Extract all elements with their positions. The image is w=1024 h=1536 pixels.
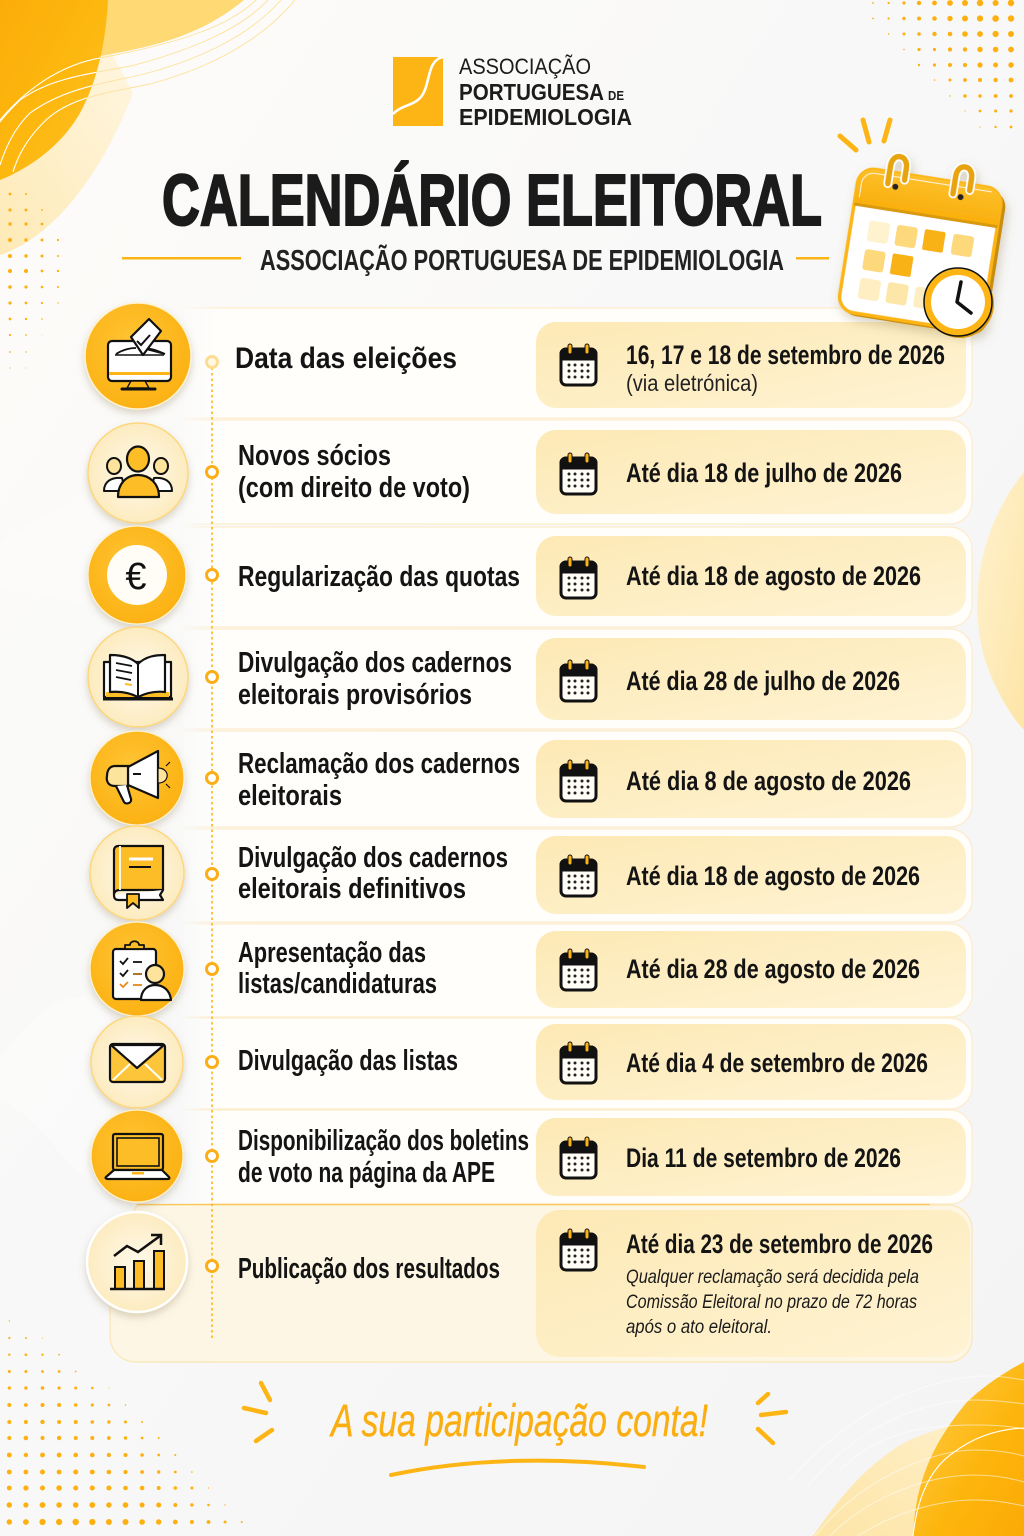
calendar illustration with clock bbox=[837, 120, 1011, 338]
connector dot bbox=[206, 356, 218, 368]
row 2: novos sócios bbox=[88, 423, 966, 523]
clock bbox=[924, 268, 994, 338]
rays bbox=[840, 120, 890, 150]
date box: Até dia 18 de agosto de 2026 bbox=[626, 861, 920, 891]
connector dot bbox=[206, 672, 218, 682]
connector dot bbox=[206, 1056, 218, 1068]
date box: Até dia 28 de julho de 2026 bbox=[626, 666, 900, 696]
background decoration: bottom right orange bbox=[790, 1362, 1024, 1536]
row 3: regularização das quotas bbox=[88, 526, 966, 624]
date box bbox=[536, 740, 966, 818]
subtitle: ASSOCIAÇÃO PORTUGUESA DE EPIDEMIOLOGIA bbox=[260, 243, 784, 277]
label: Divulgação das listas bbox=[238, 1045, 458, 1077]
label: listas/candidaturas bbox=[238, 968, 437, 1000]
label: Reclamação dos cadernos bbox=[238, 748, 520, 780]
date box: Até dia 8 de agosto de 2026 bbox=[626, 766, 911, 796]
dot pattern: top right bbox=[872, 0, 1014, 128]
date box bbox=[536, 1118, 966, 1196]
row 7: apresentação bbox=[90, 922, 966, 1016]
label: eleitorais bbox=[238, 780, 342, 812]
row 4: cadernos provisórios bbox=[88, 627, 966, 727]
icon: growth chart bbox=[87, 1212, 187, 1312]
note: após o ato eleitoral. bbox=[626, 1317, 772, 1338]
icon: open book bbox=[88, 627, 188, 727]
background decoration: soft white shapes bbox=[0, 470, 180, 1200]
row 6: cadernos definitivos bbox=[90, 826, 966, 920]
label: eleitorais provisórios bbox=[238, 679, 472, 711]
connector dot bbox=[206, 868, 218, 880]
burst right bbox=[758, 1394, 786, 1443]
date box: Até dia 18 de julho de 2026 bbox=[626, 458, 902, 488]
icon: euro bbox=[88, 526, 186, 624]
dot pattern: bottom left bbox=[7, 1320, 243, 1525]
slogan text: A sua participação conta! bbox=[329, 1395, 708, 1446]
icon: euro: € bbox=[125, 556, 147, 598]
logo text: ASSOCIAÇÃO bbox=[459, 54, 591, 79]
icon: laptop bbox=[91, 1110, 183, 1202]
row 8: divulgação das listas bbox=[91, 1016, 966, 1108]
icon: closed book bbox=[90, 826, 184, 920]
label bbox=[238, 440, 470, 504]
date box: Até dia 28 de agosto de 2026 bbox=[626, 954, 920, 984]
date box: Até dia 23 de setembro de 2026 bbox=[626, 1229, 933, 1259]
date box bbox=[536, 322, 966, 408]
logo mark bbox=[393, 57, 443, 126]
date box: Até dia 4 de setembro de 2026 bbox=[626, 1048, 928, 1078]
label: Disponibilização dos boletins bbox=[238, 1125, 529, 1157]
label bbox=[238, 748, 520, 812]
icon: people bbox=[88, 423, 188, 523]
label: Novos sócios bbox=[238, 440, 391, 472]
note: Qualquer reclamação será decidida pela bbox=[626, 1267, 919, 1288]
connector dot bbox=[206, 466, 218, 478]
logo text bbox=[459, 54, 632, 130]
timeline dotted line bbox=[211, 362, 213, 1340]
rings bbox=[887, 155, 973, 201]
logo text: EPIDEMIOLOGIA bbox=[459, 104, 632, 130]
date box: (via eletrónica) bbox=[626, 370, 758, 396]
burst left bbox=[244, 1383, 272, 1441]
date box bbox=[536, 638, 966, 720]
date box bbox=[536, 430, 966, 514]
label bbox=[238, 647, 512, 711]
background decoration: top left waves bbox=[0, 0, 295, 255]
label: eleitorais definitivos bbox=[238, 873, 466, 905]
label: Divulgação dos cadernos bbox=[238, 842, 508, 874]
row 9: disponibilização bbox=[91, 1110, 966, 1202]
date box bbox=[536, 1210, 970, 1357]
note: Comissão Eleitoral no prazo de 72 horas bbox=[626, 1292, 917, 1313]
background decoration: right edge blob bbox=[977, 472, 1024, 730]
label: Divulgação dos cadernos bbox=[238, 647, 512, 679]
underline bbox=[391, 1461, 644, 1475]
logo text: DE bbox=[608, 88, 624, 103]
connector dot bbox=[206, 1150, 218, 1162]
date box bbox=[536, 1024, 966, 1100]
label bbox=[238, 937, 437, 1000]
date box: Até dia 18 de agosto de 2026 bbox=[626, 561, 921, 591]
label: Apresentação das bbox=[238, 937, 426, 969]
row 1: data das eleições bbox=[85, 303, 966, 409]
label: Publicação dos resultados bbox=[238, 1253, 500, 1285]
connector dot bbox=[206, 772, 218, 784]
connector dot bbox=[206, 570, 218, 580]
date box: 16, 17 e 18 de setembro de 2026 bbox=[626, 340, 945, 370]
dot pattern: left bbox=[8, 193, 59, 369]
label: Data das eleições bbox=[235, 342, 457, 375]
logo bbox=[393, 54, 632, 130]
icon: megaphone bbox=[90, 731, 184, 825]
slogan bbox=[244, 1383, 786, 1475]
label: de voto na página da APE bbox=[238, 1157, 495, 1189]
icon: envelope bbox=[91, 1016, 183, 1108]
date box bbox=[536, 931, 966, 1008]
row 5: reclamação bbox=[90, 731, 966, 825]
connector dot bbox=[206, 1260, 218, 1272]
note bbox=[626, 1267, 919, 1338]
row 10: publicação dos resultados bbox=[87, 1210, 970, 1357]
icon: ballot computer bbox=[85, 303, 191, 409]
date box: Dia 11 de setembro de 2026 bbox=[626, 1143, 901, 1173]
label: (com direito de voto) bbox=[238, 472, 470, 504]
logo text: PORTUGUESA bbox=[459, 79, 604, 105]
date box bbox=[536, 536, 966, 616]
connector dot bbox=[206, 964, 218, 974]
calendar bbox=[837, 151, 1011, 337]
date box bbox=[536, 836, 966, 914]
icon: clipboard and person bbox=[90, 922, 184, 1016]
row backgrounds bbox=[110, 308, 972, 1362]
label bbox=[238, 842, 508, 905]
label bbox=[238, 1125, 529, 1189]
label: Regularização das quotas bbox=[238, 561, 520, 593]
